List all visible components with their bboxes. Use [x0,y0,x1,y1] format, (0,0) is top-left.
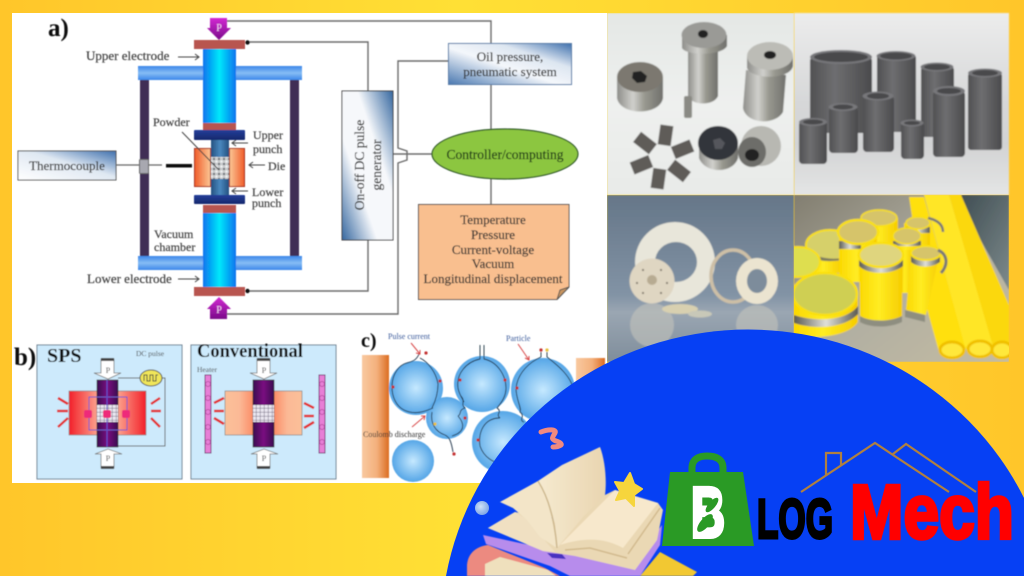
panel c: particle discharge [361,330,605,482]
SPS diagram: SPS [47,345,81,367]
icon: small blue ball [475,501,489,515]
measured parameters note: Longitudinal displacement [424,271,563,286]
vacuum chamber frame [138,66,302,270]
apparatus labels: punch [253,142,282,156]
apparatus labels: Die [268,159,285,173]
yellow book [640,552,697,576]
connection wires [226,21,491,314]
panel letter a: a) [48,15,69,42]
electrode plates and spacers [194,40,245,296]
tube 4 [968,68,1002,150]
SPS diagram: DC pulse [136,349,165,358]
apparatus labels [86,48,285,286]
pulse generator box: On-off DC pulse [352,120,367,210]
rear caps [776,210,943,293]
particle labels [363,332,531,439]
bottom pressure arrow [207,297,231,319]
logo letter B: B [691,474,725,553]
apparatus labels: Upper electrode [86,48,170,63]
charge markers [391,348,549,456]
particle labels: Particle [506,334,531,343]
small pin [684,96,692,118]
bottom pressure arrow: P [216,305,222,316]
blue semicircle badge [446,330,1024,576]
measured parameters note: Current-voltage [452,242,534,257]
SPS diagram: P [106,366,111,375]
electrodes [362,355,605,478]
turning left page [500,481,557,548]
pink book pages [485,557,556,576]
large white ring [635,222,715,302]
tube 7 [828,103,858,153]
measured parameters note [418,204,569,300]
conventional diagram: Heater [197,365,217,374]
panel b: SPS vs conventional [14,342,336,479]
particle labels: Coulomb discharge [363,430,426,439]
tube 9 [900,120,924,159]
page edge lines [565,508,660,558]
measured parameters note: Pressure [471,227,515,242]
photo: ceramic rings [607,195,794,362]
tall cap [838,220,878,282]
icon: house roof [801,443,976,492]
icon: pink squiggle [541,430,561,447]
photo: yellow polyurethane tubes [776,195,1012,362]
thin ring [711,250,755,302]
logo word LOG: LOG [757,487,833,550]
oil pressure box: Oil pressure, [477,49,543,64]
label arrows [178,54,265,282]
measured parameters note: Temperature [460,212,526,227]
page block base [488,490,663,570]
upright page [538,447,606,548]
conventional diagram: P [262,366,267,375]
apparatus labels: Lower electrode [87,271,172,286]
conventional diagram [191,342,336,479]
purple cover [483,525,662,576]
particle neck outlines [392,345,574,464]
spine shadow [547,553,566,559]
left page block [488,512,555,552]
pulse generator box [342,91,393,240]
particle labels: Pulse current [388,332,431,341]
controller ellipse [432,129,578,179]
die assembly [194,130,245,204]
front right cap [905,246,946,322]
reflections [630,303,778,347]
lower electrode column [203,212,236,287]
right top page [560,490,658,548]
thermocouple box: Thermocouple [29,158,105,173]
ceramic chips [662,304,712,318]
panel a: SPS apparatus schematic [18,15,578,319]
tall punch [682,22,727,104]
page crease [538,481,557,548]
conventional diagram: Conventional [197,342,303,362]
top pressure arrow [207,18,231,40]
angled punch [743,42,793,121]
SPS diagram [37,345,182,479]
apparatus labels: punch [252,196,281,210]
dark ring die [698,126,738,170]
tube 1 [810,50,872,133]
logo: Blog Mech [662,443,1014,556]
hexagonal blades [630,124,694,190]
tube 5 [933,86,965,157]
thermocouple box [18,151,116,180]
logo letter B [691,474,725,553]
photo: graphite tubes [794,13,1009,195]
oil pressure box [448,44,572,84]
upper electrode column [203,49,236,124]
hex die [617,62,663,112]
apparatus labels: Vacuum [154,227,194,241]
red pointer arrows [411,343,529,427]
washer [736,258,778,304]
apparatus labels: Lower [252,185,283,199]
illustration: open book stack [467,447,697,576]
tube 8 [799,118,827,164]
perforated disk [630,258,674,304]
long yellow tubes [909,195,1009,353]
apparatus labels: Upper [253,128,283,142]
measured parameters note: Vacuum [472,256,514,271]
tube 2 [876,51,916,132]
tube openings [940,341,1012,358]
thermocouple probe [116,160,192,174]
front centre cap [859,243,903,326]
top pressure arrow: P [216,23,222,34]
front large cap [793,273,858,337]
tube 6 [862,92,894,152]
powder particles [389,356,575,482]
pulse generator box: generator [369,139,384,190]
icon: green shopping bag [662,456,754,546]
dark corner [955,195,1009,290]
conventional diagram: P [262,454,267,463]
tube 3 [920,62,954,137]
white diagram sheet [12,13,607,483]
terminal dots [245,40,250,293]
panel letter b: b) [14,344,36,371]
SPS diagram: P [106,454,111,463]
icon: star [615,473,642,506]
photo: carbide dies [607,13,794,195]
pink book [467,545,560,576]
apparatus labels: chamber [154,240,195,254]
apparatus labels: Powder [153,115,190,129]
metal ring die [738,126,781,167]
oil pressure box: pneumatic system [463,64,557,79]
controller ellipse: Controller/computing [446,147,564,162]
panel letter c: c) [361,330,377,352]
